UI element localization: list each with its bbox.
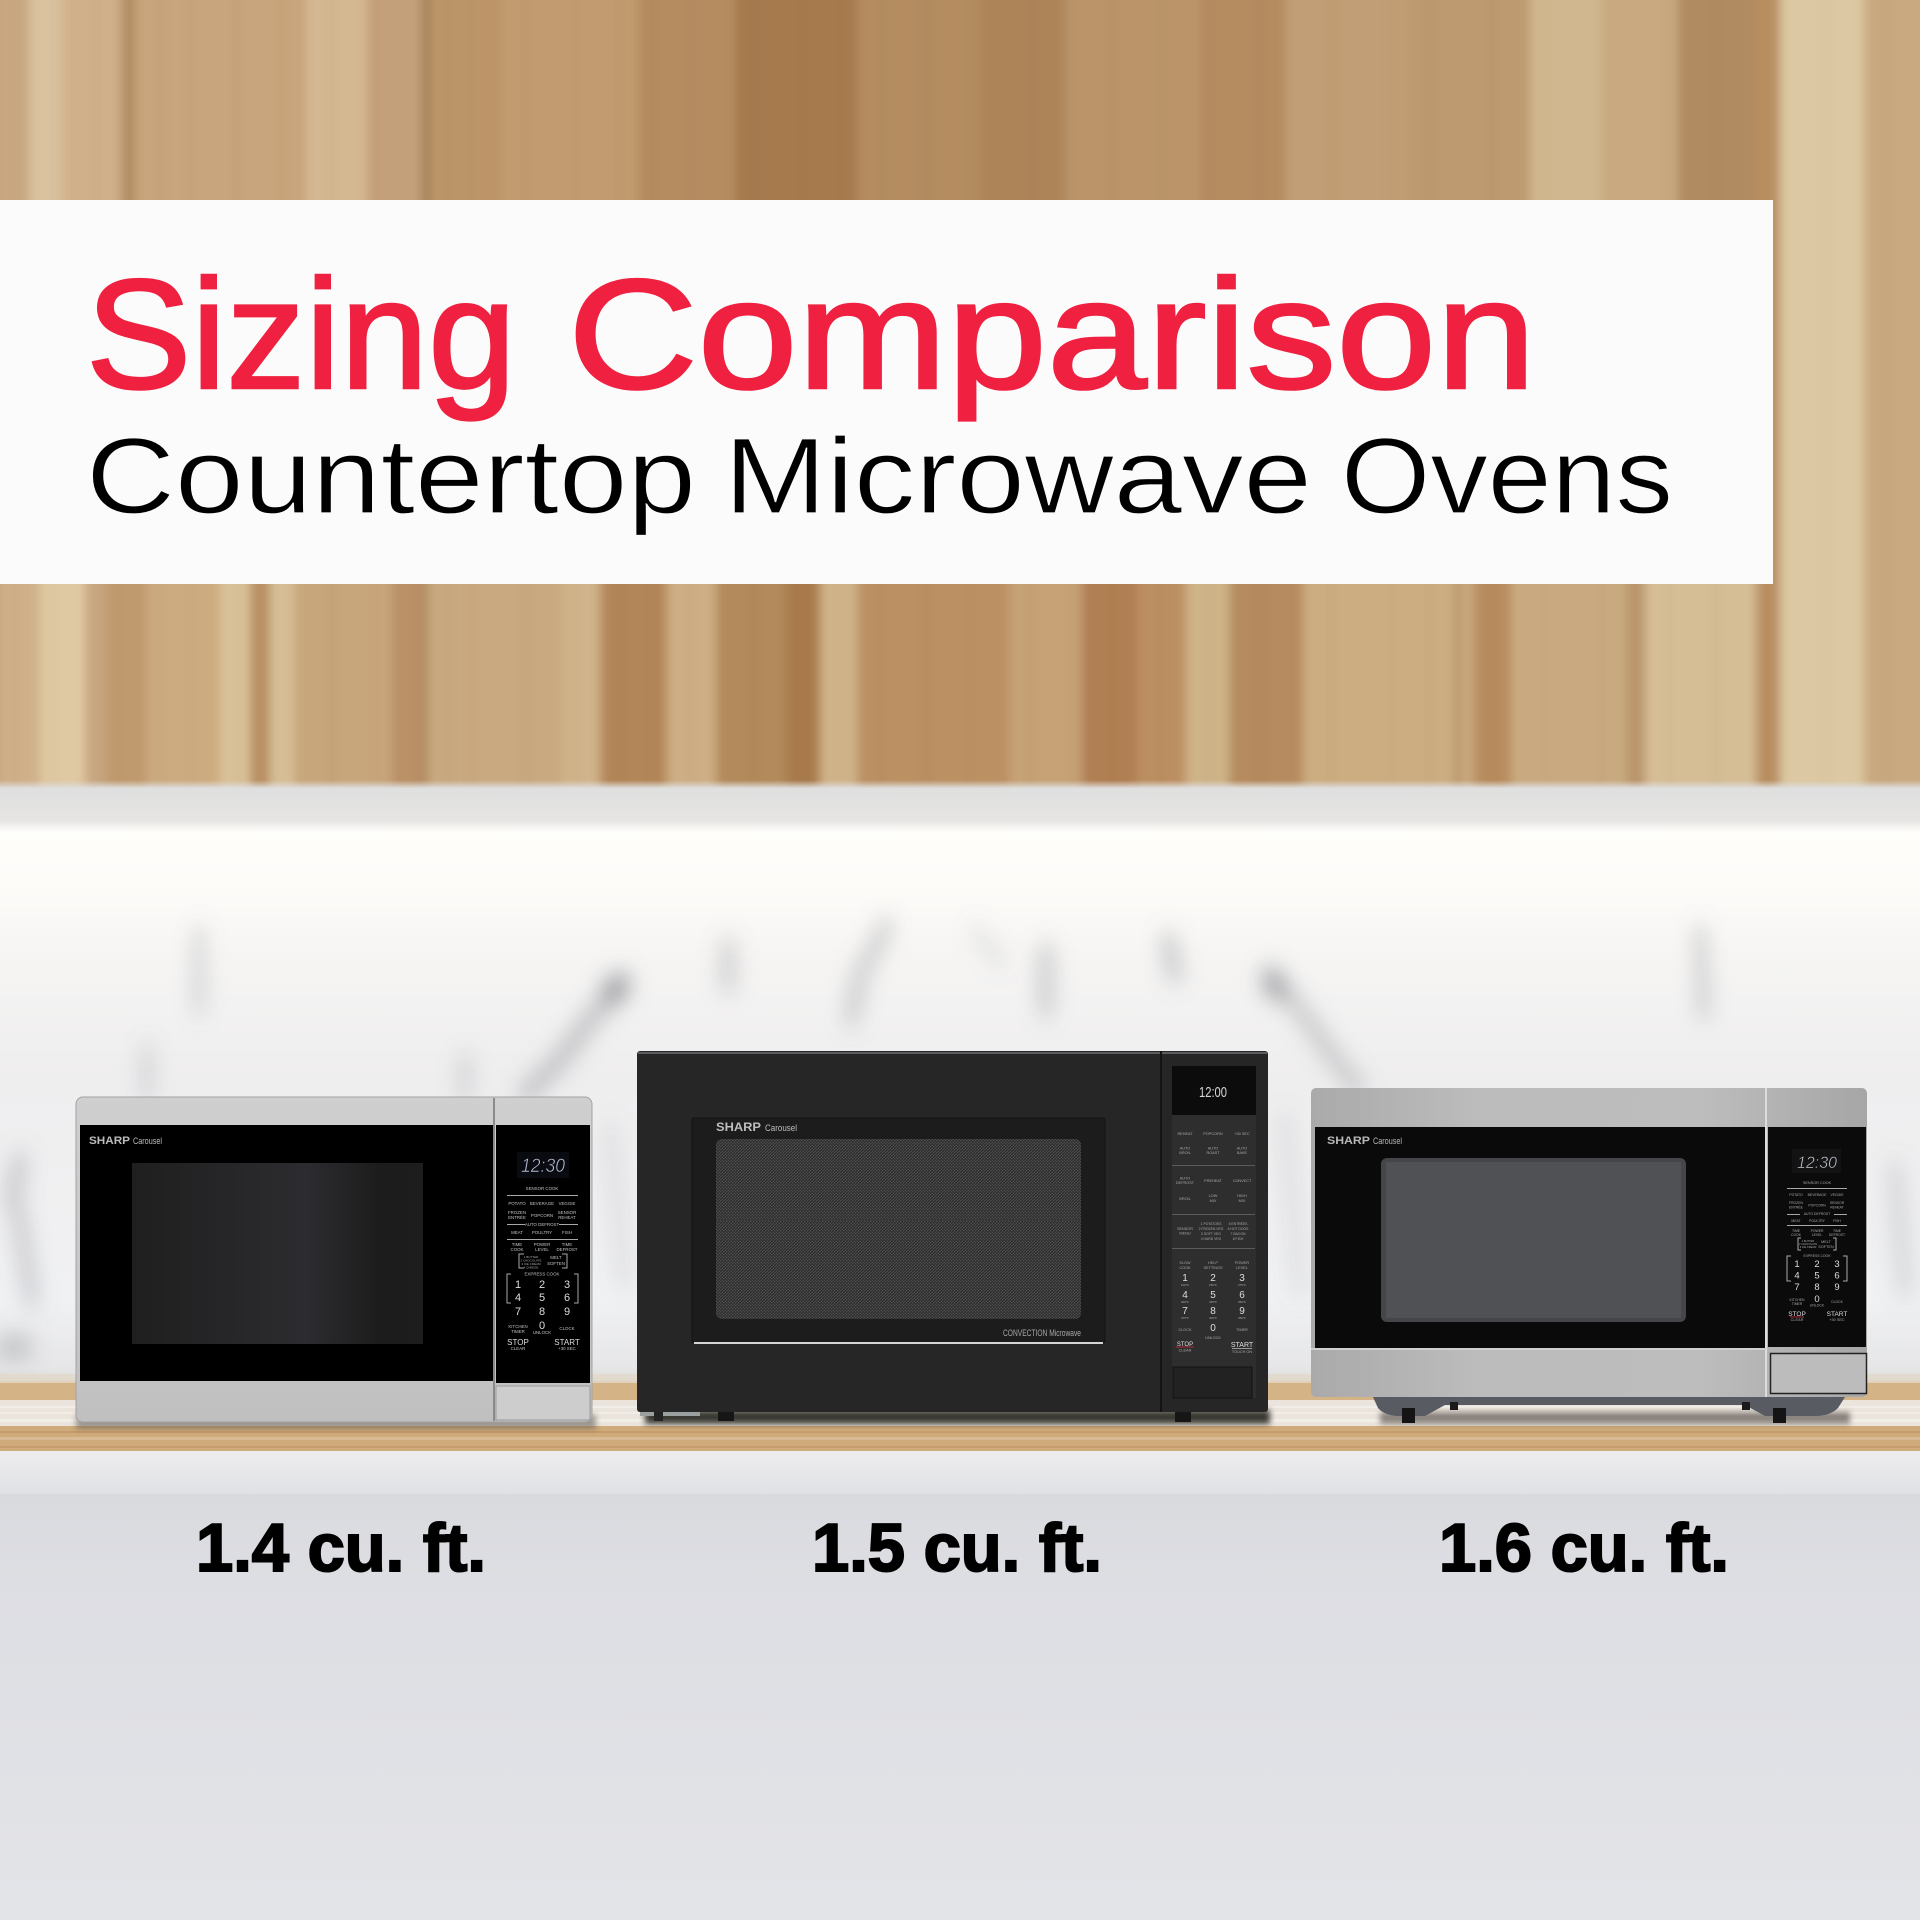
control panel: POTATO: [1789, 1193, 1803, 1197]
control panel: EXPRESS COOK: [525, 1272, 560, 1276]
control panel: VEGGIE: [1830, 1193, 1844, 1197]
control panel: SENSOR: [1177, 1227, 1193, 1231]
control panel: FROZEN: [508, 1210, 526, 1215]
control panel: 9: [1239, 1306, 1245, 1317]
upper wood boards: [0, 0, 1758, 392]
control panel: TIME: [1833, 1229, 1842, 1233]
control panel: POWER: [1235, 1261, 1249, 1265]
heading: Sizing Comparison: [86, 248, 1536, 422]
subheading: Countertop Microwave Ovens: Countertop: [86, 415, 696, 536]
control panel: 150°F: [1209, 1283, 1217, 1287]
subheading: Countertop Microwave Ovens: Microwave: [724, 415, 1312, 536]
control panel: REHEAT: [558, 1215, 576, 1220]
control panel: LOW: [1209, 1194, 1218, 1198]
control panel: MENU: [1179, 1232, 1191, 1236]
control panel: MELT: [550, 1255, 562, 1260]
control panel: POPCORN: [531, 1213, 553, 1218]
control panel: SETTINGS: [1204, 1266, 1223, 1270]
control panel: 6: [1239, 1290, 1245, 1301]
control panel: CLOCK: [559, 1326, 575, 1331]
logo: Carousel: [765, 1123, 797, 1133]
control panel: REHEAT: [1830, 1206, 1844, 1210]
control panel: SENSOR COOK: [526, 1186, 558, 1191]
control panel: SENSOR: [1830, 1201, 1845, 1205]
control panel: SOFTEN: [1818, 1245, 1834, 1249]
control panel: 1: [515, 1279, 521, 1291]
control panel: VEGGIE: [559, 1201, 575, 1206]
control panel: POWER: [1811, 1229, 1824, 1233]
base and feet: [1373, 1397, 1850, 1424]
control panel: HIGH: [1237, 1194, 1247, 1198]
control panel: START: [1231, 1342, 1254, 1349]
control panel: 4 HARD VEG: [1201, 1237, 1222, 1241]
control panel: 7 BACON: [1231, 1232, 1246, 1236]
control panel: KITCHEN: [1790, 1298, 1805, 1302]
control panel: 1: [1182, 1273, 1188, 1284]
control panel: 4: [1182, 1290, 1188, 1301]
control panel: 9: [564, 1306, 570, 1318]
logo: SHARP: [716, 1120, 761, 1134]
control panel: 8: [1814, 1282, 1820, 1293]
control panel: 2: [1814, 1259, 1820, 1270]
model label: CONVECTION Microwave: [1003, 1328, 1081, 1338]
control panel: 5: [539, 1292, 545, 1304]
control panel: 6: [1834, 1270, 1840, 1282]
control panel: AUTO: [1237, 1146, 1247, 1150]
heading: Sizing Comparison: Comparison: [568, 248, 1536, 422]
logo: [716, 1120, 797, 1134]
control panel: TIME: [1792, 1229, 1801, 1233]
logo: SHARP: [89, 1135, 130, 1147]
control panel: 1: [1794, 1259, 1800, 1270]
control panel: 3 SOFT VEG: [1201, 1232, 1221, 1236]
control panel: 1 BUTTER: [1802, 1239, 1814, 1243]
control panel: +30 SEC: [558, 1346, 576, 1351]
background: wooden countertop: [0, 1374, 1920, 1920]
control panel: POULTRY: [1809, 1219, 1826, 1223]
control panel: LEVEL: [1236, 1266, 1248, 1270]
control panel: START: [554, 1338, 580, 1347]
control panel: MEAT: [511, 1230, 523, 1235]
control panel: 300°F: [1181, 1300, 1189, 1304]
control panel: 400°F: [1209, 1316, 1217, 1320]
control panel: SOFTEN: [547, 1261, 565, 1266]
control panel: 5 ENTRÉES: [1229, 1221, 1248, 1226]
control panel: KITCHEN: [508, 1324, 528, 1329]
control panel: BEVERAGE: [530, 1201, 554, 1206]
control panel: LEVEL: [535, 1247, 549, 1252]
control panel: 4 CHEESE: [524, 1266, 538, 1270]
subheading: Countertop Microwave Ovens: [86, 415, 1673, 536]
heading: Sizing Comparison: Sizing: [86, 248, 516, 422]
control panel: [1172, 1066, 1256, 1398]
control panel: 350°F: [1238, 1300, 1246, 1304]
control panel: DEFROST: [557, 1247, 578, 1252]
control panel: AUTO: [1180, 1176, 1190, 1180]
control panel: SLOW: [1179, 1261, 1191, 1265]
control panel: BROIL: [1179, 1197, 1191, 1201]
control panel: 12:30: [521, 1156, 565, 1177]
control panel: TIMER: [511, 1329, 525, 1334]
control panel: COOK: [1791, 1233, 1802, 1237]
control panel: 12:30: [1797, 1153, 1838, 1172]
control panel: BAKE: [1237, 1151, 1248, 1155]
background: marble backsplash: [0, 780, 1920, 1385]
control panel: 5: [1210, 1290, 1216, 1301]
control panel: POPCORN: [1808, 1204, 1826, 1208]
control panel: UNLOCK: [1205, 1336, 1221, 1340]
wood grain streaks: [14, 0, 1888, 800]
control panel: SENSOR COOK: [1803, 1181, 1832, 1185]
control panel: 2 CHOCOLATE: [1799, 1242, 1817, 1246]
control panel: CLEAR: [1179, 1348, 1192, 1352]
control panel: MEAT: [1791, 1219, 1801, 1223]
control panel: FROZEN: [1789, 1201, 1804, 1205]
control panel: START: [1827, 1311, 1847, 1318]
control panel: POTATO: [508, 1201, 526, 1206]
control panel: TOUCH ON: [1232, 1350, 1252, 1354]
capacity label: 1.5 cu. ft.: 1.5 cu. ft.: [812, 1510, 1102, 1586]
control panel: CLEAR: [1791, 1318, 1804, 1322]
control panel: 0: [1210, 1323, 1216, 1334]
control panel: TIMER: [1792, 1302, 1803, 1306]
control panel: PREHEAT: [1204, 1179, 1223, 1183]
control panel: REHEAT: [1177, 1132, 1193, 1136]
control panel: UNLOCK: [1810, 1304, 1825, 1308]
logo: Carousel: [133, 1136, 162, 1146]
control panel: 3: [1239, 1273, 1245, 1284]
control panel: 450°F: [1238, 1316, 1246, 1320]
control panel: AUTO DEFROST: [525, 1222, 559, 1227]
logo: [1327, 1135, 1402, 1147]
control panel: 1 BUTTER: [524, 1255, 539, 1259]
control panel: LEVEL: [1812, 1233, 1822, 1237]
control panel: POULTRY: [532, 1230, 552, 1235]
control panel: 4: [515, 1292, 521, 1304]
control panel: ENTRÉE: [1789, 1204, 1804, 1210]
control panel: 0: [539, 1320, 545, 1332]
door frame: [692, 1118, 1105, 1343]
control panel: MIX: [1239, 1199, 1246, 1203]
control panel: COOK: [511, 1247, 524, 1252]
logo: SHARP: [1327, 1135, 1370, 1147]
control panel: 100°F: [1181, 1283, 1189, 1287]
control panel: SENSOR: [558, 1210, 576, 1215]
capacity label: 1.6 cu. ft.: 1.6 cu. ft.: [1439, 1510, 1729, 1586]
control panel: STOP: [1177, 1342, 1193, 1348]
door release drawer: [496, 1386, 590, 1420]
control panel: CLOCK: [1178, 1328, 1192, 1332]
logo: [89, 1135, 162, 1147]
window: [132, 1163, 423, 1344]
control panel: ROAST: [1206, 1151, 1220, 1155]
door panel: [1315, 1127, 1765, 1349]
control panel: 6 HOT DOGS: [1228, 1227, 1249, 1231]
window: [1381, 1158, 1686, 1322]
control panel: EXPRESS COOK: [1804, 1254, 1831, 1258]
control panel: 0: [1814, 1294, 1820, 1305]
control panel: 8: [1210, 1306, 1216, 1317]
capacity label: 1.4 cu. ft.: 1.4 cu. ft.: [196, 1510, 486, 1586]
control panel: AUTO DEFROST: [1804, 1212, 1830, 1216]
control panel: MELT: [1821, 1240, 1832, 1244]
control panel: 1 POTATOES: [1201, 1222, 1222, 1226]
control panel: BROIL: [1179, 1151, 1191, 1155]
control panel: UNLOCK: [533, 1330, 551, 1335]
control panel: 7: [515, 1306, 521, 1318]
control panel: COOK: [1179, 1266, 1191, 1270]
title banner: [0, 200, 1773, 584]
control panel: 3: [1834, 1259, 1840, 1270]
control panel: POPCORN: [1203, 1132, 1223, 1136]
microwave: 1.4 cu. ft. stainless: [76, 1097, 596, 1429]
control panel: 375°F: [1181, 1316, 1189, 1320]
control panel: 5: [1814, 1270, 1820, 1282]
control panel: 8 FISH: [1233, 1237, 1244, 1241]
control panel: BEVERAGE: [1808, 1193, 1827, 1197]
control panel: FISH: [562, 1230, 572, 1235]
right wood strip: [1756, 0, 1920, 800]
lower wood boards: [0, 392, 1756, 792]
control panel: 3 ICE CREAM: [1800, 1245, 1816, 1249]
background: wood cabinets: [0, 0, 1920, 800]
control panel: POWER: [534, 1242, 550, 1247]
control panel: AUTO: [1208, 1146, 1218, 1150]
control panel: 2 FROZEN VEG: [1199, 1227, 1224, 1231]
door release drawer: [1770, 1354, 1866, 1394]
control panel: DEFROST: [1176, 1181, 1195, 1185]
control panel: CONVECT: [1233, 1179, 1252, 1183]
control panel: TIME: [512, 1242, 522, 1247]
control panel: 7: [1182, 1306, 1188, 1317]
control panel: FISH: [1833, 1219, 1841, 1223]
control panel: AUTO: [1180, 1146, 1190, 1150]
microwave: 1.6 cu. ft. stainless: [1311, 1088, 1867, 1424]
door panel: [80, 1125, 493, 1381]
control panel: [496, 1125, 590, 1383]
subheading: Countertop Microwave Ovens: Ovens: [1341, 415, 1673, 536]
control panel: 7: [1794, 1282, 1800, 1293]
control panel: MIX: [1210, 1199, 1217, 1203]
control panel: ENTRÉE: [508, 1215, 526, 1220]
control panel: 3 ICE CREAM: [521, 1262, 541, 1266]
control panel: [1768, 1127, 1866, 1347]
microwave: 1.5 cu. ft. black convection: [637, 1051, 1270, 1424]
control panel: 325°F: [1209, 1300, 1217, 1304]
control panel: CLEAR: [511, 1346, 525, 1351]
control panel: CLOCK: [1831, 1300, 1844, 1304]
control panel: STOP: [507, 1338, 529, 1347]
control panel: 9: [1834, 1282, 1840, 1293]
control panel: 6: [564, 1292, 570, 1304]
control panel: TIMER: [1236, 1328, 1248, 1332]
control panel: 2 CHOCOLATE: [521, 1258, 541, 1262]
control panel: +30 SEC: [1829, 1318, 1845, 1322]
control panel: 2: [1210, 1273, 1216, 1284]
feet and bracket: [640, 1411, 1191, 1422]
control panel: STOP: [1788, 1311, 1806, 1318]
mesh window: [716, 1139, 1081, 1319]
control panel: 8: [539, 1306, 545, 1318]
logo: Carousel: [1373, 1136, 1402, 1146]
control panel: TIME: [562, 1242, 572, 1247]
control panel: +30 SEC: [1234, 1132, 1250, 1136]
control panel: HELP: [1208, 1261, 1218, 1265]
control panel: 2: [539, 1279, 545, 1291]
control panel: 275°F: [1238, 1283, 1246, 1287]
control panel: 4: [1794, 1270, 1800, 1282]
control panel: DEFROST: [1829, 1233, 1845, 1237]
control panel: 3: [564, 1279, 570, 1291]
control panel: 12:00: [1199, 1084, 1227, 1101]
